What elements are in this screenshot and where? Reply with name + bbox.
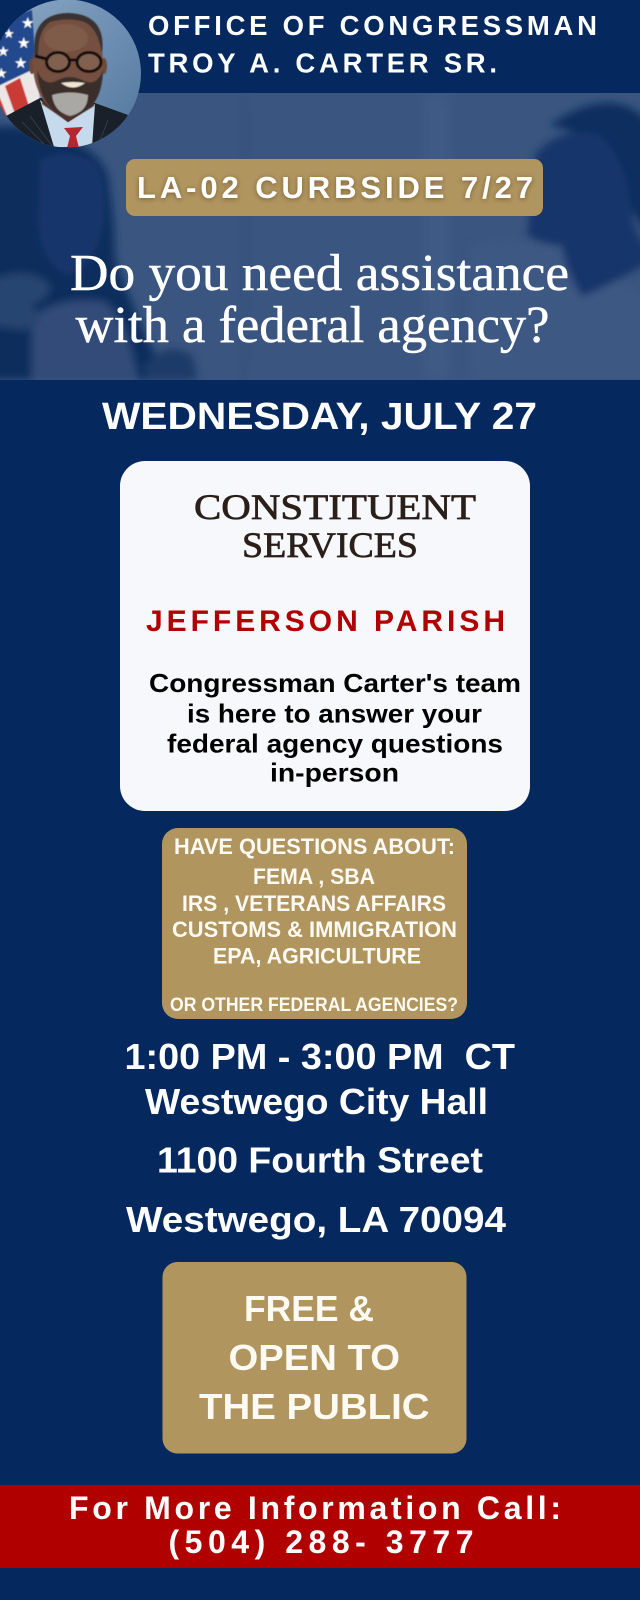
flag: ★ bbox=[17, 35, 30, 52]
head bbox=[29, 58, 35, 74]
panel: agency questions: OR OTHER FEDERAL AGENCIES? bbox=[170, 995, 458, 1016]
contact bar: For More Information Call: bbox=[69, 1490, 561, 1526]
flag: ★ bbox=[14, 55, 27, 72]
callout: free and open to the public: OPEN TO bbox=[228, 1337, 400, 1378]
left woman bbox=[0, 126, 198, 380]
parish name: JEFFERSON PARISH bbox=[146, 605, 505, 638]
event time and location: 1100 Fourth Street bbox=[157, 1140, 483, 1180]
description bbox=[149, 668, 521, 788]
headline: Do you need assistance bbox=[70, 245, 569, 302]
shirt bbox=[40, 100, 95, 147]
neck bbox=[41, 97, 95, 122]
panel: agency questions bbox=[162, 828, 467, 1019]
event time and location: Westwego, LA 70094 bbox=[126, 1199, 506, 1240]
description: Congressman Carter's team bbox=[149, 668, 521, 698]
event time and location bbox=[124, 1036, 515, 1240]
suit bbox=[6, 98, 128, 150]
flag bbox=[0, 10, 40, 118]
panel: constituent services bbox=[120, 461, 530, 811]
header title: OFFICE OF CONGRESSMAN bbox=[148, 10, 597, 41]
panel: agency questions: HAVE QUESTIONS ABOUT: bbox=[174, 834, 455, 859]
portrait of the Congressman bbox=[0, 0, 150, 150]
photo band: two women talking bbox=[0, 93, 640, 380]
contact bar: (504) 288- 3777 bbox=[168, 1524, 474, 1560]
callout: free and open to the public bbox=[162, 1262, 466, 1454]
callout: free and open to the public: THE PUBLIC bbox=[199, 1386, 430, 1427]
date heading: WEDNESDAY, JULY 27 bbox=[102, 396, 537, 438]
event time and location: 1:00 PM - 3:00 PM CT bbox=[124, 1036, 515, 1077]
tie bbox=[64, 127, 83, 148]
panel: agency questions: CUSTOMS & IMMIGRATION bbox=[172, 917, 457, 942]
callout: free and open to the public: FREE & bbox=[244, 1288, 374, 1329]
gold badge: LA-02 Curbside: LA-02 CURBSIDE 7/27 bbox=[137, 170, 533, 205]
headline: with a federal agency? bbox=[76, 297, 550, 354]
panel heading: SERVICES bbox=[242, 525, 418, 565]
header band bbox=[0, 0, 640, 93]
event time and location: Westwego City Hall bbox=[145, 1081, 488, 1122]
header title: TROY A. CARTER SR. bbox=[148, 48, 497, 78]
description: is here to answer your bbox=[187, 698, 482, 728]
description: federal agency questions bbox=[167, 728, 503, 758]
smile bbox=[61, 82, 85, 88]
headline bbox=[70, 245, 569, 354]
hair bbox=[34, 13, 103, 58]
panel heading: CONSTITUENT bbox=[194, 487, 476, 527]
panel heading bbox=[194, 487, 476, 565]
beard bbox=[37, 70, 103, 116]
glasses bbox=[46, 52, 70, 72]
panel: agency questions: IRS , VETERANS AFFAIRS bbox=[182, 891, 446, 916]
flag: ★ bbox=[21, 15, 34, 32]
flag: ★ bbox=[3, 26, 15, 41]
contact bar bbox=[0, 1485, 640, 1568]
header title bbox=[148, 10, 597, 78]
panel: agency questions: FEMA , SBA bbox=[253, 864, 375, 889]
right woman bbox=[524, 98, 640, 296]
gold badge: LA-02 Curbside bbox=[126, 159, 543, 216]
panel: agency questions: EPA, AGRICULTURE bbox=[213, 944, 421, 968]
description: in-person bbox=[270, 758, 399, 788]
